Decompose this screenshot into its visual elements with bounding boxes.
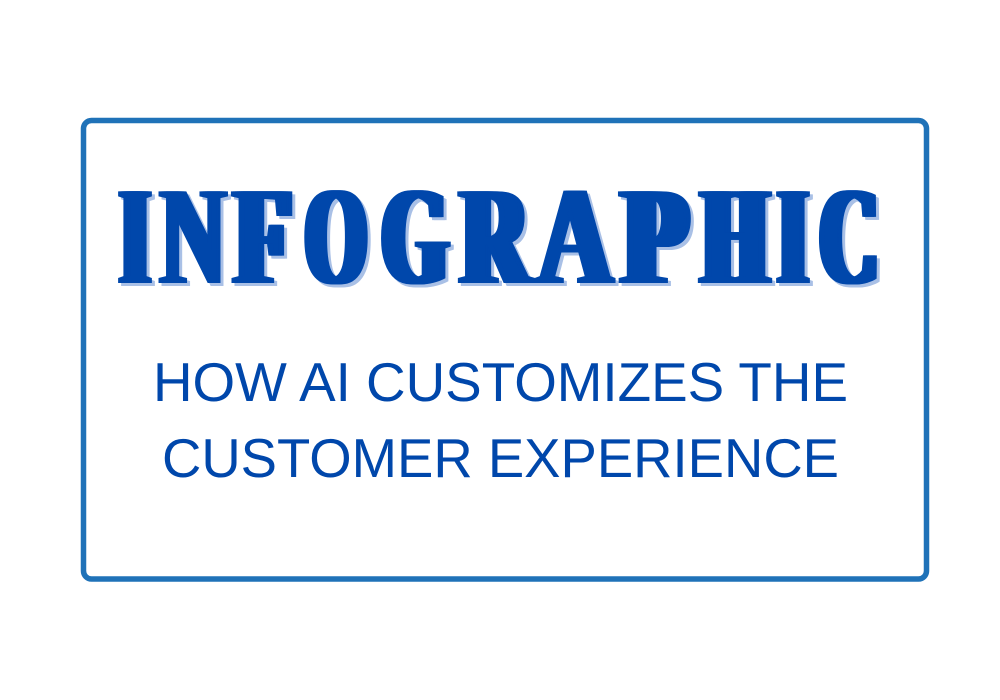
subtitle: HOW AI CUSTOMIZES THE [153,351,848,413]
title: P [622,159,687,314]
title: I [780,159,805,314]
title: I [123,159,147,314]
title: O [305,159,366,314]
title: N [160,159,225,314]
panel: border frame [84,120,926,579]
title: G [382,159,448,314]
subtitle [153,351,848,489]
subtitle: CUSTOMER EXPERIENCE [162,427,839,489]
title: F [235,159,291,314]
title [118,159,880,314]
title: C [820,159,878,314]
title: H [703,159,766,314]
title: A [538,159,612,314]
title: R [461,159,528,314]
